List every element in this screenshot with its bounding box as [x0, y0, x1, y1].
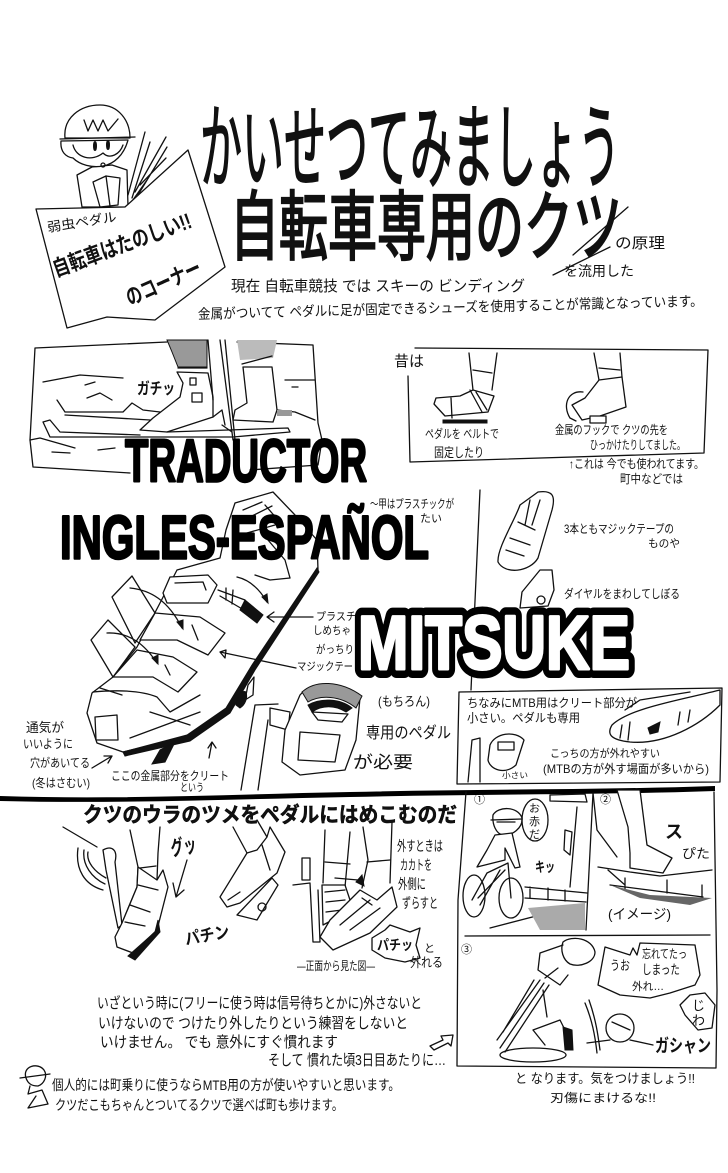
sound effect: pachin: パチン: [183, 922, 231, 949]
buckle ladder: [218, 588, 263, 623]
sign: corner title: [36, 150, 225, 328]
MTB text line 3: こっちの方が外れやすい: [550, 746, 660, 760]
speech bubble: 赤: [529, 815, 540, 828]
figure: cleat clicking into pedal: [183, 820, 285, 949]
straps: [113, 575, 225, 692]
label: dial: ダイヤルをまわしてしぼる: [564, 586, 680, 601]
foot with belt: [434, 353, 497, 423]
small dial shoe: [520, 570, 554, 608]
MTB text line 4: (MTBの方が外す場面が多いから): [543, 761, 709, 776]
section divider: [0, 786, 715, 802]
label: required: が必要: [353, 753, 413, 772]
caption: be careful: と なります。気をつけましょう!!: [515, 1071, 695, 1086]
arrow: to comic: [430, 1035, 453, 1050]
sign corner label: のコーナー: [122, 255, 205, 311]
burst bubble: うお: [610, 958, 630, 973]
paragraph: practice: いけないので つけたり外したりという練習をしないと: [98, 1015, 408, 1032]
speech bubble: お: [529, 802, 540, 815]
comic panels: [457, 790, 717, 1068]
sound effect: su: ス: [665, 822, 683, 842]
traffic pole: [550, 794, 587, 887]
mascot character with helmet: [60, 105, 167, 207]
arrow and label: plastic part: [267, 610, 356, 656]
sound effect: ガチッ: [137, 380, 175, 398]
label: cleat: ここの金属部分をクリート: [111, 769, 229, 783]
arrow and label: plastic part: しめちゃ: [313, 624, 351, 637]
label: ventilation: 穴があいてる: [30, 755, 90, 770]
sweat bubble: わ: [692, 1013, 705, 1028]
overlay: english-spanish: INGLES-ESPAÑOL: [60, 503, 429, 572]
arrow and label: plastic part: プラスチ: [316, 610, 356, 623]
paragraph: practice: そして 慣れた頃3日目あたりに…: [268, 1051, 446, 1069]
note: personal opinion: クツだこもちゃんとついてるクツで選べば町も歩けます。: [55, 1097, 343, 1113]
burst bubble: 外れ…: [632, 980, 664, 993]
overlay: mitsuke: MITSUKE: [358, 601, 630, 686]
burst bubble: [598, 943, 700, 998]
caption: scrapes: 刃傷にまけるな!!: [550, 1090, 656, 1105]
label: three straps: 3本ともマジックテープの: [564, 522, 674, 536]
arrow and label: plastic part: がっちり: [316, 642, 354, 656]
sign main label: 自転車はたのしい!!: [49, 208, 195, 282]
label: ventilation: [23, 720, 112, 790]
note: to remove: 外すときは: [397, 838, 443, 854]
small author character: [20, 1066, 50, 1108]
intro text line 1: 現在 自転車競技 では スキーの ビンディング: [231, 277, 525, 295]
sign small label: 弱虫ペダル: [46, 209, 118, 235]
caption: belt: ペダルを ベルトで: [425, 426, 499, 441]
burst bubble: しまった: [642, 962, 680, 977]
note: to remove: 外側に: [398, 876, 426, 892]
panel 1: stopped at light: ①: [474, 793, 485, 806]
MTB text line 1: ちなみにMTB用はクリート部分が: [467, 695, 637, 710]
overlay: mitsuke: MITSUKE: [358, 601, 630, 686]
note: to remove: カカトを: [400, 857, 432, 873]
sound effect: pita: ぴた: [682, 846, 710, 861]
panel: ski boot binding: [30, 340, 322, 473]
sweat bubble: じ: [692, 998, 705, 1013]
label: ventilation: (冬はさむい): [32, 775, 90, 790]
panel 2: clipped shoe: [593, 790, 712, 922]
arrow and label: velcro: マジックテー: [297, 660, 353, 673]
panel 2: clipped shoe: ②: [600, 793, 611, 806]
heading: old days: 昔は: [394, 353, 424, 370]
label: to: と: [424, 942, 435, 955]
title line 2: 自転車専用のクツ: [230, 185, 622, 270]
note: personal opinion: [52, 1077, 400, 1113]
label: of course: (もちろん): [378, 694, 430, 709]
figure: front view, removing: [293, 822, 397, 950]
overlay: translator: TRADUCTOR: [125, 427, 367, 494]
sound effect: crash: ガシャン: [655, 1036, 711, 1056]
label: plastic 2: たい: [420, 512, 442, 525]
MTB shoe sole: [610, 690, 720, 742]
big road shoe illustration: [87, 492, 319, 764]
heading: clip the cleat: クツのウラのツメをペダルにはめこむのだ: [83, 803, 457, 827]
label: comes off: 外れる: [410, 955, 443, 970]
caption: image: (イメージ): [608, 906, 671, 922]
label: cleat: [111, 742, 229, 794]
sound effect: ki: キッ: [535, 859, 555, 875]
panel: MTB note: [457, 688, 722, 784]
caption: small: 小さい: [502, 771, 528, 780]
note: to remove: ずらすと: [402, 895, 438, 911]
note: in town: 町中などでは: [620, 471, 683, 486]
caption: front view: —正面から見た図—: [297, 959, 375, 973]
panel 1: stopped at light: [463, 793, 587, 930]
label: dedicated pedal: 専用のペダル: [366, 724, 451, 742]
label: ventilation: 通気が: [26, 720, 64, 735]
foot with hook: [566, 353, 626, 423]
label: monoya: ものや: [648, 537, 680, 550]
vertical divider: [471, 490, 480, 690]
pedal and crank illustration: [241, 683, 362, 790]
panel: old pedals: [408, 348, 708, 462]
speech bubble: だ: [529, 828, 540, 841]
MTB text line 2: 小さい。ペダルも専用: [467, 710, 580, 725]
burst: pachi: パチッ: [377, 937, 413, 953]
arrow and label: velcro: [220, 650, 353, 673]
burst bubble: 忘れてたっ: [642, 947, 687, 961]
arrows onto straps: [107, 577, 268, 664]
panel 3: tip over: ③: [461, 943, 472, 956]
caption: fixed: 固定したり: [434, 445, 484, 460]
down arrow: [173, 860, 187, 897]
caption: hook: 金属のフックで クツの先を: [555, 423, 668, 437]
burst: pachi: [372, 925, 420, 962]
paragraph: practice: [97, 994, 446, 1069]
paragraph: practice: いざという時に(フリーに使う時は信号待ちとかに)外さないと: [97, 994, 422, 1012]
sound effect: gu: グッ: [169, 833, 198, 861]
sweat bubble: [680, 993, 715, 1030]
label: cleat: という: [180, 781, 204, 794]
paragraph: practice: いけません。 でも 意外にすぐ慣れます: [100, 1033, 338, 1051]
panel 3: tip over: [461, 938, 715, 1062]
figure: pressing foot down: [63, 827, 198, 960]
small velcro shoe: [498, 492, 553, 570]
speech bubble: [522, 799, 548, 841]
note: still used: ↑これは 今でも使われてます。: [569, 456, 704, 471]
title line 1: かいせつてみましょう: [200, 98, 620, 201]
note: to remove: [397, 838, 443, 911]
MTB pedal: [468, 734, 524, 782]
label: principle: の原理: [615, 235, 665, 252]
label: plastic: 〜甲はプラスチックが: [370, 496, 454, 511]
shoe flaps: [91, 576, 155, 677]
intro text line 1 end: を流用した: [564, 263, 634, 279]
label: ventilation: いいように: [23, 737, 73, 751]
note: personal opinion: 個人的には町乗りに使うならMTB用の方が使いやすいと思います。: [52, 1077, 400, 1093]
